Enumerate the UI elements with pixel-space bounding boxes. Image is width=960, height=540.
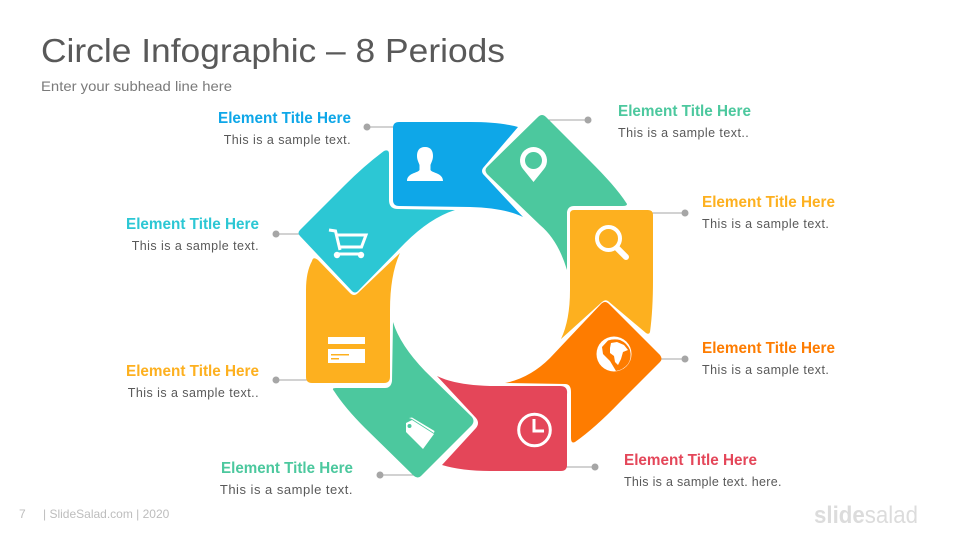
- label: right orange: Element Title Here: [702, 340, 835, 357]
- connector: green bottom: [376, 472, 416, 478]
- icon: price tag: [406, 418, 434, 449]
- connector: blue: [364, 124, 395, 130]
- label: right yellow: Element Title Here: [702, 194, 835, 211]
- icon: pin hole: [525, 152, 542, 169]
- label: bottom left green: [220, 460, 353, 497]
- icon: card lines: [331, 354, 349, 360]
- segment: cyan with cart icon: [298, 150, 455, 292]
- label: top right green: [618, 103, 751, 140]
- segment: yellow left with card icon: [306, 253, 400, 383]
- segment: green top with pin icon: [486, 115, 627, 270]
- icon: user: [407, 147, 443, 181]
- label: bottom left green: Element Title Here: [221, 460, 353, 477]
- label: left yellow: [126, 363, 259, 400]
- subhead: Enter your subhead line here: [41, 78, 232, 94]
- icon: tag hole: [408, 424, 412, 428]
- label: bottom right red: [624, 452, 782, 489]
- icon: globe ocean: [602, 339, 631, 371]
- label: bottom right red: This is a sample text. here.: [624, 475, 782, 489]
- label: bottom right red: Element Title Here: [624, 452, 757, 469]
- icon: credit card: [328, 337, 365, 363]
- footer: 7: [19, 507, 26, 521]
- footer: | SlideSalad.com | 2020: [43, 507, 170, 521]
- connector: red: [565, 464, 598, 470]
- label: bottom left green: This is a sample text.: [220, 482, 353, 497]
- label: right orange: [702, 340, 835, 377]
- segment: orange with globe icon: [505, 302, 662, 442]
- icon: globe land: [610, 342, 628, 365]
- connector: green top: [545, 116, 592, 124]
- icon: location pin: [520, 147, 547, 182]
- icon: globe: [596, 336, 632, 372]
- connector: orange: [660, 356, 688, 362]
- label: right orange: This is a sample text.: [702, 363, 829, 377]
- label: right yellow: [702, 194, 835, 231]
- segment: yellow right with search icon: [561, 210, 653, 339]
- label: top left blue: Element Title Here: [218, 110, 351, 127]
- segment: blue with user icon: [393, 122, 523, 217]
- label: right yellow: This is a sample text.: [702, 217, 829, 231]
- connector: cyan: [272, 230, 302, 238]
- segment: red with clock icon: [437, 376, 567, 471]
- icon: magnifier: [597, 227, 626, 257]
- label: top right green: Element Title Here: [618, 103, 751, 120]
- segment: green bottom with tag icon: [333, 322, 474, 478]
- title: Circle Infographic – 8 Periods: [41, 33, 505, 70]
- label: left cyan: This is a sample text.: [132, 239, 259, 253]
- label: left yellow: This is a sample text..: [128, 386, 259, 400]
- label: top left blue: [218, 110, 351, 147]
- icon: shopping cart: [329, 230, 366, 254]
- label: top right green: This is a sample text..: [618, 126, 749, 140]
- connector: yellow right: [650, 210, 688, 216]
- label: top left blue: This is a sample text.: [224, 133, 351, 147]
- connector: yellow left: [272, 376, 310, 384]
- label: left cyan: Element Title Here: [126, 216, 259, 233]
- label: left yellow: Element Title Here: [126, 363, 259, 380]
- icon: clock: [519, 414, 550, 446]
- logo: slidesalad: [814, 502, 918, 529]
- icon: cart wheels: [334, 252, 364, 258]
- label: left cyan: [126, 216, 259, 253]
